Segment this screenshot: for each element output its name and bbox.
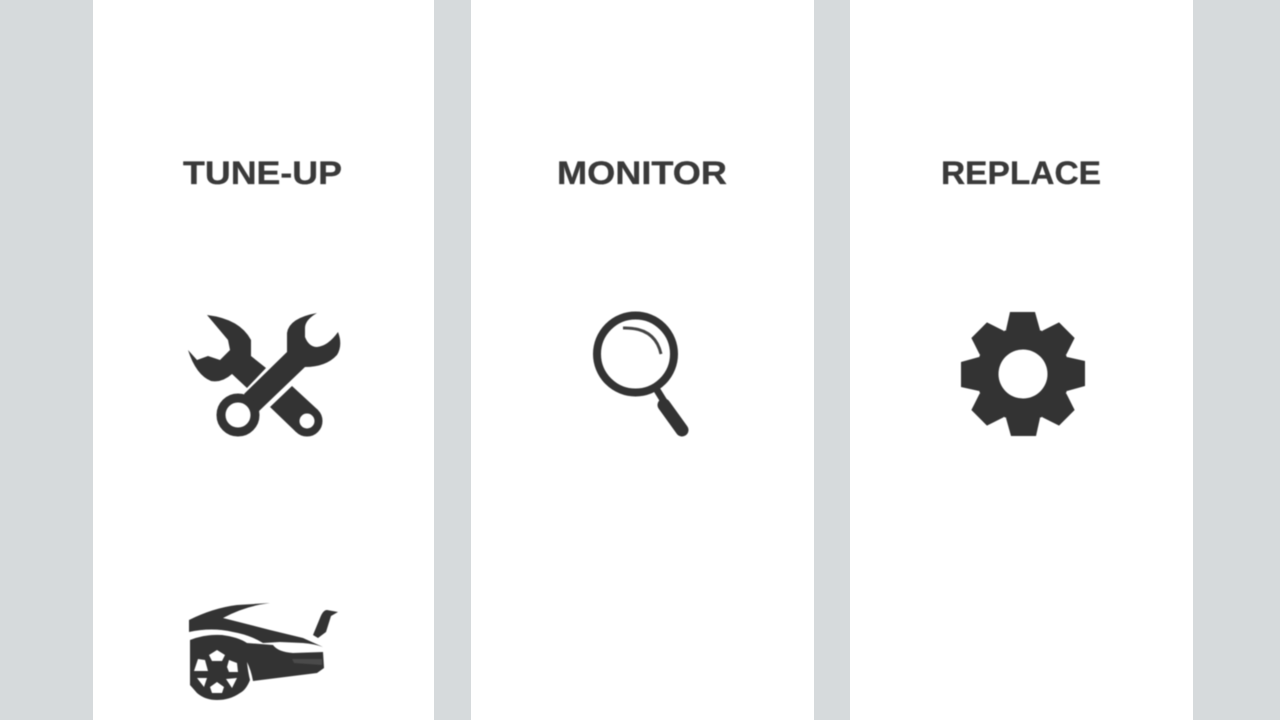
icon: crossed wrenches xyxy=(188,313,340,432)
icon: gear xyxy=(961,312,1085,436)
icon: car with open hood xyxy=(189,603,338,700)
panel: monitor xyxy=(471,0,814,720)
panel: tune-up xyxy=(93,0,434,720)
panel: replace xyxy=(850,0,1193,720)
icon: magnifying glass xyxy=(597,316,682,430)
heading: monitor: MONITOR xyxy=(557,155,727,191)
heading: replace: REPLACE xyxy=(941,155,1101,191)
heading: tune-up: TUNE-UP xyxy=(183,155,342,191)
